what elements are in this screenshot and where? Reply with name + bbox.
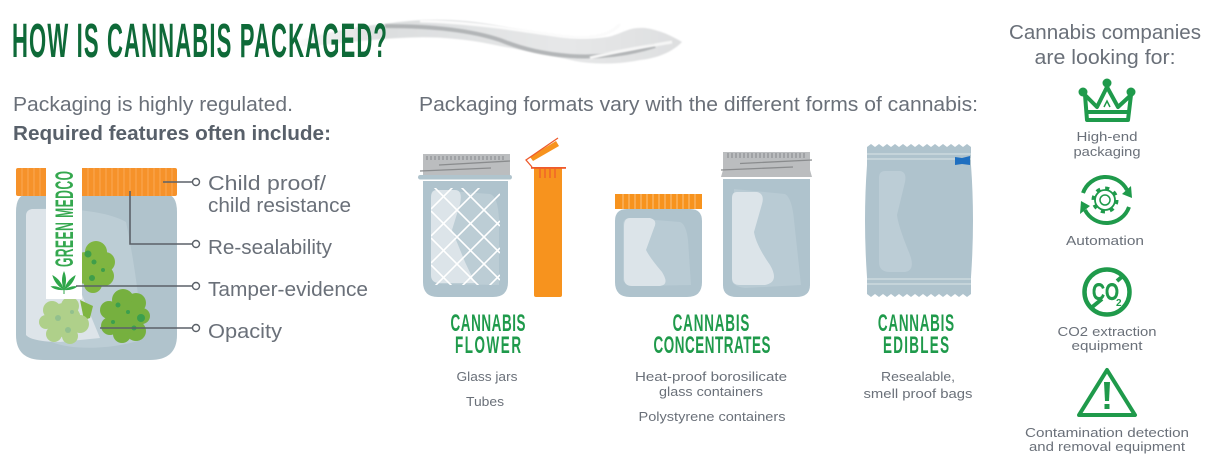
jar body [16, 194, 177, 360]
icon: CO2: 2 [1116, 298, 1122, 309]
feature labels: Tamper-evidence [208, 279, 368, 301]
leader lines [76, 182, 193, 328]
cannabis buds [39, 241, 150, 344]
edibles formats text [864, 369, 973, 401]
icon: crown [1078, 78, 1136, 120]
icon: CO2: CO [1092, 279, 1119, 306]
inner jar shine [26, 209, 141, 348]
edibles formats text: Resealable, [881, 369, 955, 384]
label: contamination detection: Contamination detection [1025, 425, 1189, 440]
concentrates small jar [615, 194, 702, 297]
heading: cannabis concentrates: CANNABIS [673, 310, 749, 337]
label: high-end packaging: packaging [1074, 144, 1140, 159]
intro text: packaging formats: Packaging formats vary with the different forms of cannabis: [419, 94, 978, 116]
label: high-end packaging [1074, 129, 1140, 159]
heading: cannabis edibles: CANNABIS [878, 310, 954, 337]
concentrates formats text: Heat-proof borosilicate [635, 369, 787, 384]
flower formats text: Tubes [466, 394, 505, 409]
concentrates formats text [635, 369, 787, 424]
heading: cannabis flower: CANNABIS [450, 310, 526, 337]
concentrates tall jar [721, 152, 812, 297]
label: high-end packaging: High-end [1076, 129, 1138, 144]
icon: CO2 [1084, 270, 1130, 314]
flower formats text: Glass jars [456, 369, 518, 384]
heading: cannabis concentrates [653, 310, 771, 359]
label: CO2 extraction equipment: CO2 extraction [1058, 324, 1156, 339]
icon: cannabis leaf [50, 271, 78, 294]
edibles bag [865, 144, 973, 297]
heading: cannabis concentrates: CONCENTRATES [653, 332, 771, 359]
feature labels: Child proof/ [208, 173, 327, 195]
feature labels: child resistance [208, 195, 351, 217]
heading: cannabis edibles [878, 310, 954, 359]
heading: cannabis flower: FLOWER [455, 332, 521, 359]
heading: cannabis flower [450, 310, 526, 359]
orange lid [16, 168, 177, 196]
feature labels [208, 173, 368, 343]
icon: automation gear [1080, 177, 1132, 223]
intro text: regulated: Packaging is highly regulated. [13, 94, 293, 116]
right column heading [1009, 22, 1201, 69]
concentrates formats text: Polystyrene containers [638, 409, 786, 424]
flower formats text [456, 369, 518, 409]
right column heading: are looking for: [1034, 47, 1176, 69]
concentrates formats text: glass containers [659, 384, 764, 399]
annotated jar illustration [16, 168, 200, 360]
brand label [46, 168, 82, 299]
feature labels: Opacity [208, 321, 282, 343]
label: contamination detection [1025, 425, 1189, 454]
label: CO2 extraction equipment [1058, 324, 1156, 353]
label: automation: Automation [1066, 233, 1144, 248]
flower glass jar [418, 154, 512, 297]
edibles formats text: smell proof bags [864, 386, 973, 401]
orange tube [526, 138, 566, 297]
right column heading: Cannabis companies [1009, 22, 1201, 44]
feature labels: Re-sealability [208, 237, 332, 259]
intro text: required features: Required features often include: [13, 123, 331, 145]
heading: cannabis edibles: EDIBLES [883, 332, 949, 359]
title: HOW IS CANNABIS PACKAGED? [12, 13, 387, 67]
label: contamination detection: and removal equipment [1029, 439, 1185, 454]
smoke wisp [287, 20, 682, 64]
label: CO2 extraction equipment: equipment [1072, 338, 1143, 353]
icon: warning triangle [1079, 370, 1135, 415]
brand name: GREEN MEDCO [51, 171, 79, 267]
